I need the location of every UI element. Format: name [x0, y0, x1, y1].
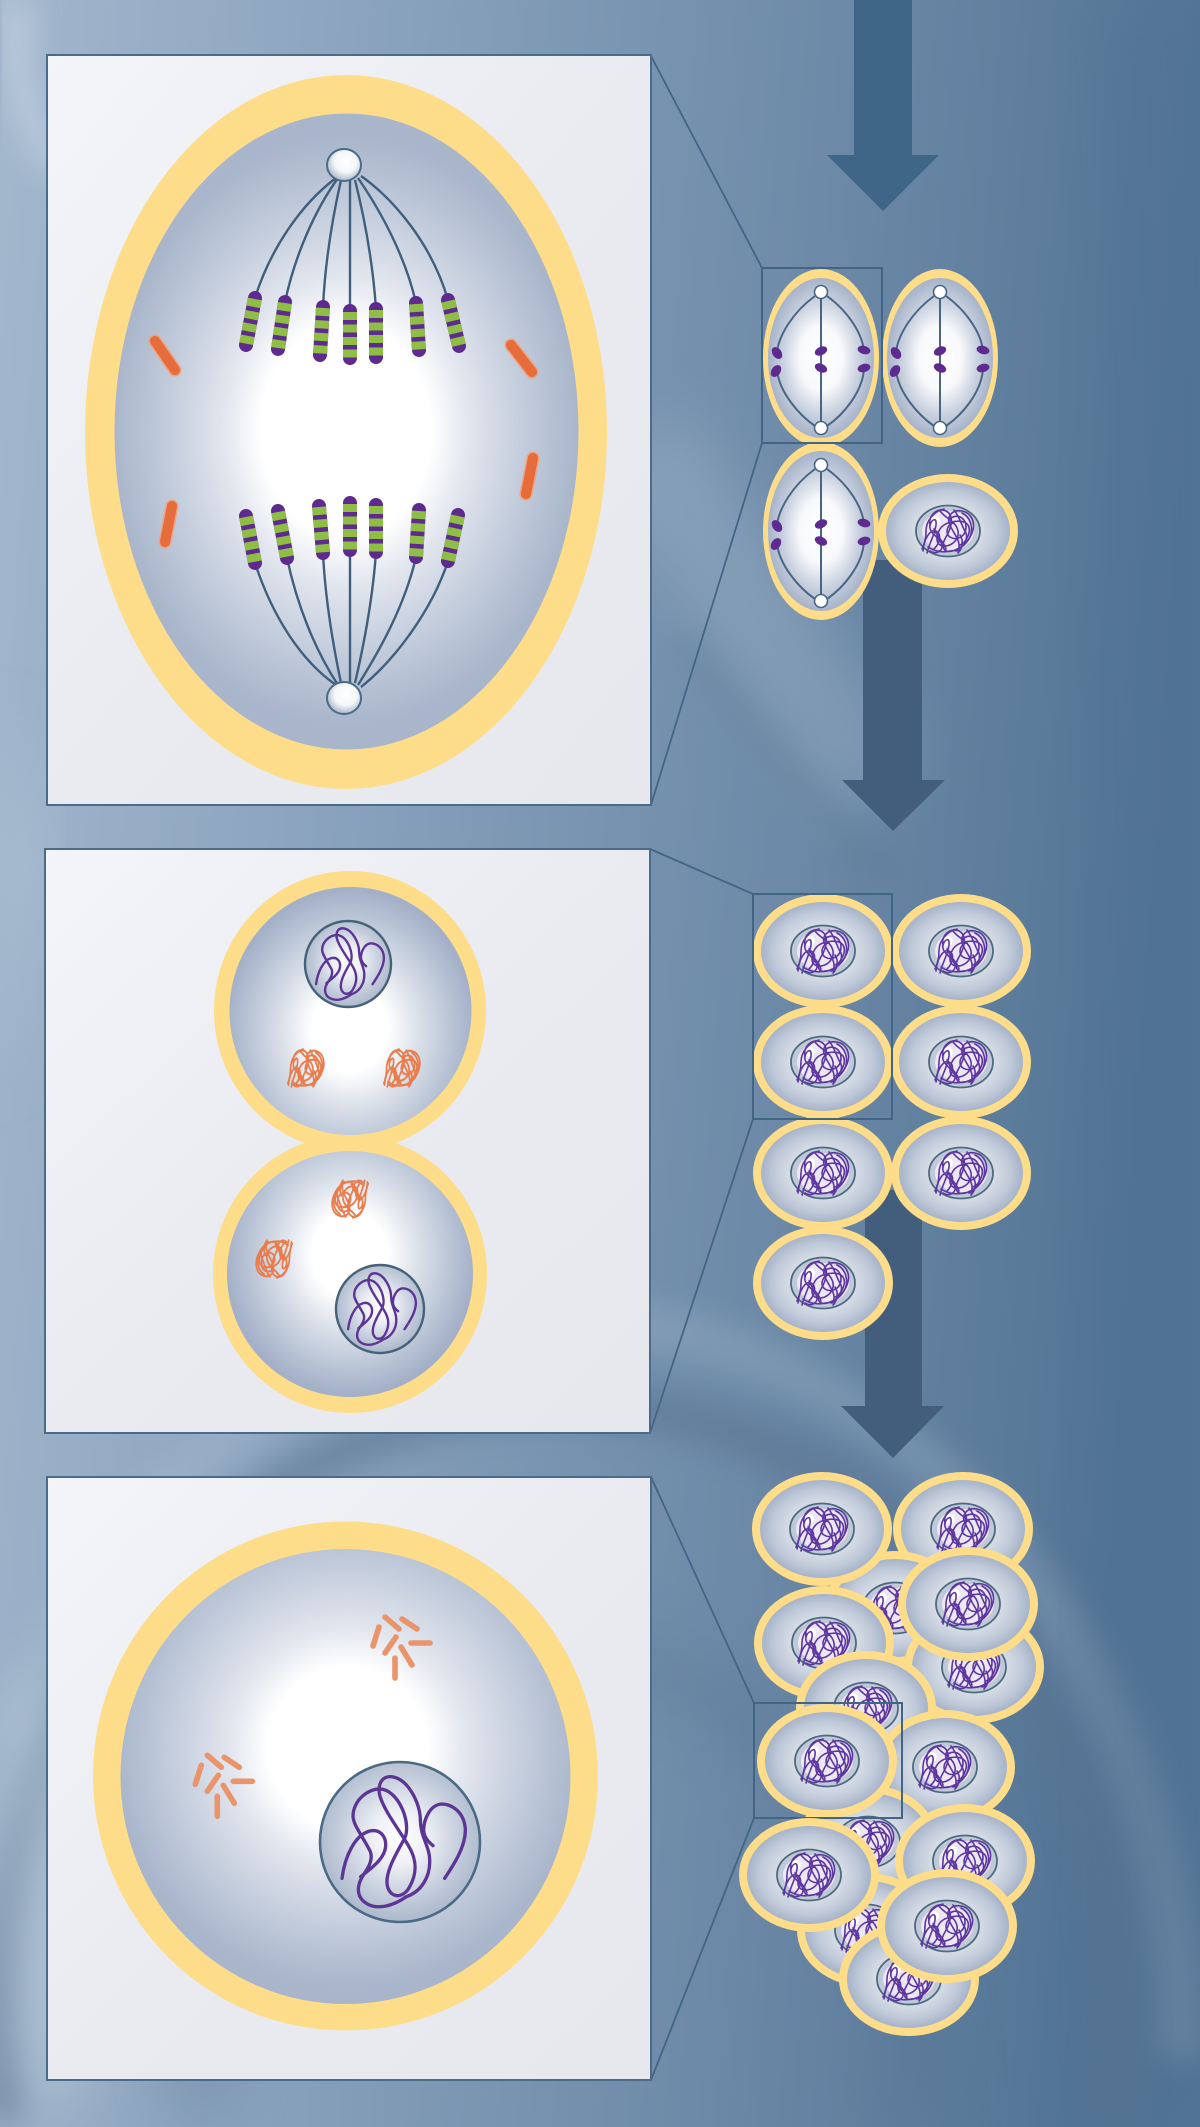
cell: [893, 1472, 1033, 1586]
cell: [797, 1873, 937, 1987]
cell: [891, 1005, 1031, 1119]
cell: [891, 894, 1031, 1008]
cell: [752, 1472, 892, 1586]
zoom connector lines: [650, 56, 762, 2080]
top nucleus: [305, 921, 391, 1007]
cell: [825, 1551, 965, 1665]
cell: [754, 1586, 894, 1700]
purple chromosomes with green bands: [246, 298, 459, 563]
interphase cell: [878, 474, 1018, 588]
cell membrane and cytoplasm: [85, 75, 607, 789]
arrow: bottom: [841, 1190, 944, 1458]
cell pair: [213, 871, 487, 1413]
bottom nucleus: [336, 1265, 424, 1353]
arrow: top: [827, 0, 939, 211]
cell group: stage 3: [739, 1472, 1044, 2036]
cell: [875, 1710, 1015, 1824]
cell: [753, 894, 893, 1008]
dividing cell: [763, 442, 879, 620]
cell: [895, 1804, 1035, 1918]
cell: [739, 1818, 879, 1932]
panel: two daughter cells: [45, 849, 650, 1433]
dividing cell: [882, 269, 998, 447]
zoom box: stage 2: [753, 894, 892, 1119]
cell group: stage 2: [753, 894, 1031, 1340]
orange chromosome clumps: [256, 1049, 420, 1278]
cell: [757, 1704, 897, 1818]
cell: [839, 1922, 979, 2036]
cell: [796, 1651, 936, 1765]
cell: [898, 1547, 1038, 1661]
cell: [753, 1005, 893, 1119]
panel: single cell: [47, 1477, 651, 2080]
spindle poles: [327, 149, 361, 714]
orange chromosomes: [155, 341, 533, 542]
large nucleus: [320, 1762, 480, 1922]
spindle fibres: [255, 176, 448, 687]
cell: [753, 1226, 893, 1340]
cell: [798, 1785, 938, 1899]
large cell: [93, 1522, 598, 2030]
cell: [904, 1610, 1044, 1724]
cell group: stage 1: [763, 269, 1018, 620]
zoom box: stage 3: [754, 1703, 902, 1818]
arrow: middle: [842, 560, 945, 831]
dividing cell: [763, 269, 879, 447]
orange chromosome groups: [195, 1617, 430, 1816]
panel: dividing cell: [47, 55, 651, 805]
cell: [877, 1869, 1017, 1983]
cell: [753, 1116, 893, 1230]
zoom box: stage 1: [762, 268, 882, 443]
cell: [891, 1116, 1031, 1230]
